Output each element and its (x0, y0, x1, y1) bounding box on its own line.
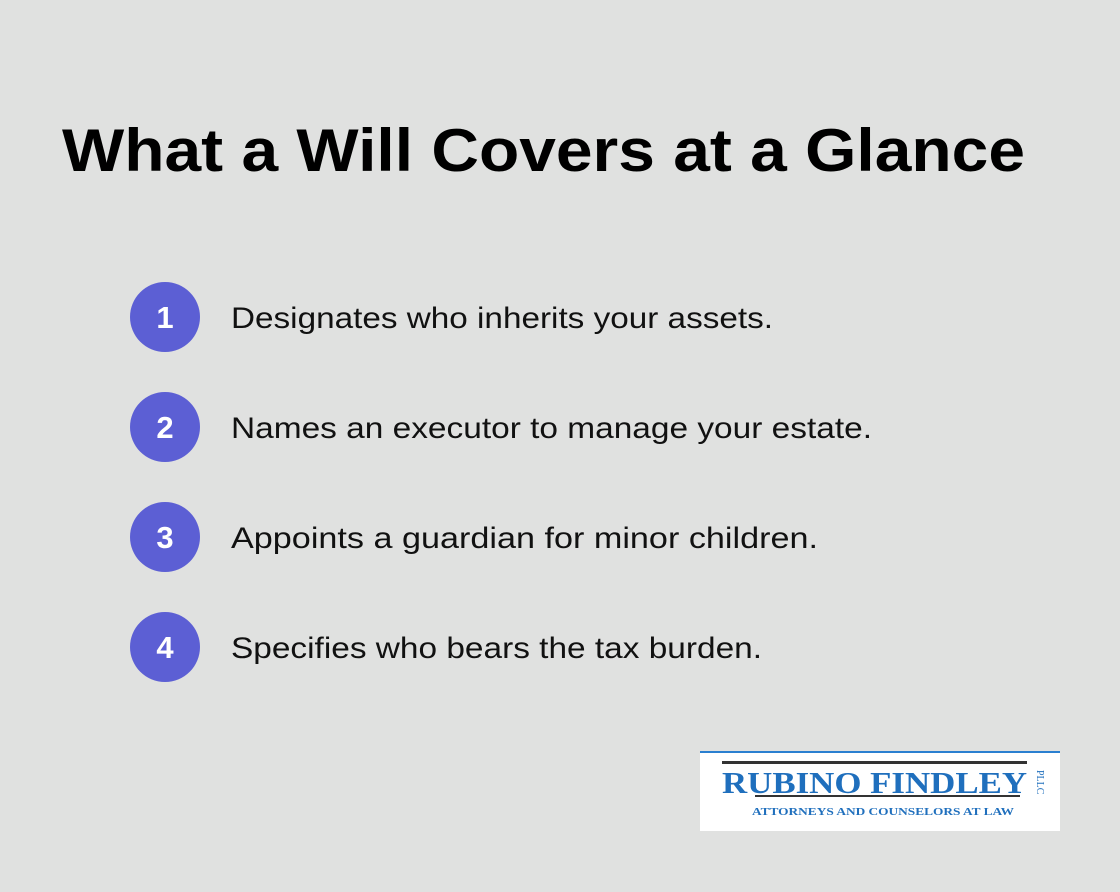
list item 4: Specifies who bears the tax burden. (231, 632, 762, 665)
list item 2 (130, 392, 872, 462)
list item 1 (130, 282, 773, 352)
logo: Rubino Findley (700, 751, 1060, 831)
list item 4 (130, 612, 762, 682)
list item 2: Names an executor to manage your estate. (231, 412, 872, 445)
list item 2: 2 (156, 410, 174, 445)
logo: Rubino Findley: ATTORNEYS AND COUNSELORS AT LAW (752, 807, 1014, 818)
list item 4: 4 (156, 630, 174, 665)
list item 3: 3 (156, 520, 174, 555)
list item 1: Designates who inherits your assets. (231, 302, 773, 335)
logo: Rubino Findley: RUBINO FINDLEY (722, 765, 1027, 800)
logo: Rubino Findley: PLLC (1034, 770, 1045, 795)
title: What a Will Covers at a Glance (62, 117, 1025, 184)
list item 3 (130, 502, 818, 572)
list item 3: Appoints a guardian for minor children. (231, 522, 818, 555)
list item 1: 1 (156, 300, 174, 335)
